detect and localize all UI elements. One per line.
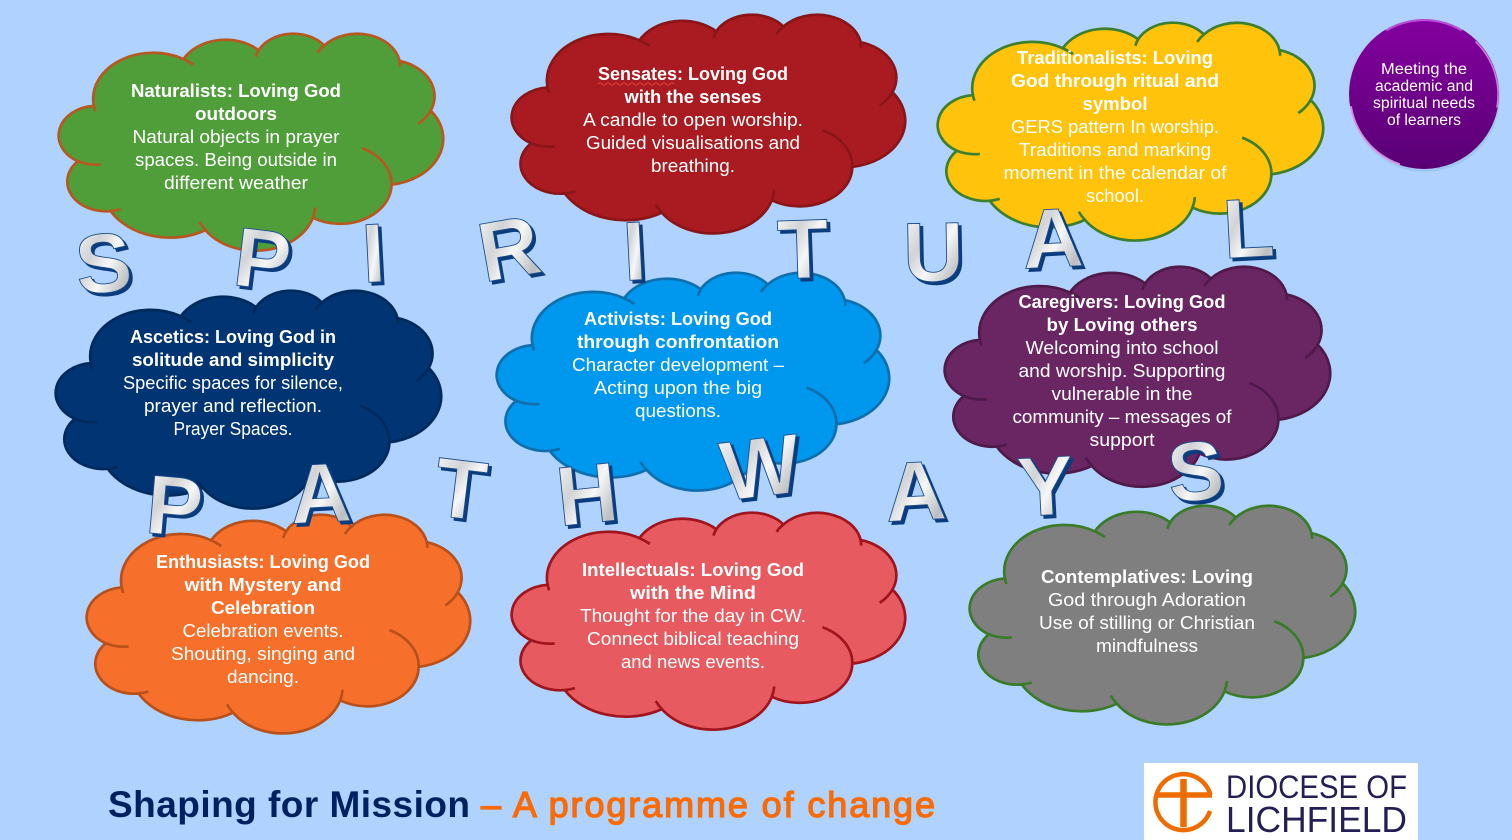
panel: Naturalists cloud: [59, 34, 443, 251]
text: Intellectuals: [580, 559, 806, 672]
text: Enthusiasts: Celebration: [211, 597, 315, 618]
icon: cross in circle: [1155, 774, 1212, 830]
heading: SPIRITUAL letters: [71, 180, 1277, 312]
text: Ascetics: Prayer Spaces.: [174, 418, 292, 439]
text: Caregivers: and worship. Supporting: [1018, 360, 1226, 381]
text: Intellectuals: Connect biblical teaching: [587, 628, 799, 649]
text: Caregivers: Welcoming into school: [1026, 337, 1218, 358]
text: Intellectuals: with the Mind: [629, 582, 756, 603]
text: Traditionalists: [1004, 47, 1227, 206]
heading: SPIRITUAL letters: U: [902, 204, 965, 300]
text: Ascetics: solitude and simplicity: [132, 349, 335, 370]
heading: SPIRITUAL letters: S: [71, 214, 135, 312]
text: Contemplatives: mindfulness: [1096, 635, 1198, 656]
text: Traditionalists: school.: [1086, 185, 1144, 206]
heading: SPIRITUAL letters: I: [620, 203, 649, 299]
panel: Intellectuals cloud: [512, 513, 905, 730]
heading: SPIRITUAL letters: L: [1220, 180, 1277, 276]
panel: Contemplatives cloud: [970, 506, 1355, 724]
logo: Diocese of Lichfield: [1144, 763, 1418, 840]
text: Sensates: [583, 63, 803, 176]
text: Caregivers: by Loving others: [1046, 314, 1198, 335]
footer title: Shaping for Mission: [108, 784, 935, 825]
heading: SPIRITUAL letters: I: [359, 205, 388, 301]
text: Activists: Character development –: [572, 354, 785, 375]
text: Traditionalists: moment in the calendar of: [1004, 162, 1227, 183]
logo wordmark: [1226, 769, 1407, 840]
text: Naturalists: spaces. Being outside in: [135, 149, 337, 170]
heading: PATHWAYS letters: [143, 416, 1227, 555]
text: Traditionalists: Traditionalists: Loving: [1017, 47, 1213, 68]
logo wordmark: DIOCESE OF: [1226, 769, 1407, 805]
text: Sensates: with the senses: [624, 86, 762, 107]
cloud shape: yellow: [938, 23, 1323, 241]
heading: SPIRITUAL letters: A: [1020, 190, 1085, 287]
text: Caregivers: Caregivers: Loving God: [1018, 291, 1226, 312]
cloud shape: coral: [512, 513, 905, 730]
heading: SPIRITUAL letters: T: [776, 201, 830, 297]
text: Traditionalists: symbol: [1082, 93, 1148, 114]
heading: PATHWAYS letters: S: [1163, 422, 1227, 520]
badge: Meeting the academic and spiritual needs of learners: academic and: [1375, 78, 1473, 95]
panel: Traditionalists cloud: [938, 23, 1323, 241]
text: Naturalists: different weather: [164, 172, 308, 193]
text: Ascetics: prayer and reflection.: [144, 395, 322, 416]
heading: PATHWAYS letters: T: [429, 439, 492, 539]
text: Intellectuals: Thought for the day in CW.: [580, 605, 806, 626]
text: Contemplatives: Contemplatives: Loving: [1041, 566, 1253, 587]
panel: Enthusiasts cloud: [87, 515, 470, 733]
text: Naturalists: outdoors: [195, 103, 277, 124]
panel: Ascetics cloud: [56, 291, 441, 509]
heading: PATHWAYS letters: W: [715, 416, 806, 519]
text: Enthusiasts: with Mystery and: [183, 574, 342, 595]
text: Activists: questions.: [635, 400, 721, 421]
text: Activists: Acting upon the big: [594, 377, 762, 398]
text: Traditionalists: God through ritual and: [1011, 70, 1219, 91]
heading: SPIRITUAL letters: P: [229, 209, 296, 309]
text: Ascetics: [123, 326, 343, 439]
text: Naturalists: [131, 80, 341, 193]
badge: Meeting the academic and spiritual needs of learners: Meeting the: [1381, 61, 1467, 78]
heading: PATHWAYS letters: A: [288, 445, 353, 542]
text: Traditionalists: Traditions and marking: [1019, 139, 1211, 160]
text: Sensates: Sensates: Loving God: [598, 63, 788, 84]
text: Caregivers: [1012, 291, 1232, 450]
text: Sensates: Guided visualisations and: [586, 132, 800, 153]
text: Ascetics: Ascetics: Loving God in: [130, 326, 336, 347]
logo wordmark: LICHFIELD: [1226, 799, 1407, 840]
text: Intellectuals: Intellectuals: Loving God: [582, 559, 804, 580]
footer title: Shaping for Mission: – A programme of change: [481, 784, 935, 825]
text: Contemplatives: God through Adoration: [1048, 589, 1246, 610]
text: Enthusiasts: Celebration events.: [182, 620, 344, 641]
text: Enthusiasts: dancing.: [227, 666, 299, 687]
text: Ascetics: Specific spaces for silence,: [123, 372, 343, 393]
cloud shape: red: [512, 15, 905, 233]
badge: Meeting the academic and spiritual needs of learners: of learners: [1387, 112, 1461, 129]
text: Activists: Activists: Loving God: [584, 308, 772, 329]
text: Naturalists: Naturalists: Loving God: [131, 80, 341, 101]
text: Enthusiasts: Enthusiasts: Loving God: [156, 551, 370, 572]
text: Caregivers: support: [1090, 429, 1154, 450]
cloud shape: grey: [970, 506, 1355, 724]
text: Caregivers: community – messages of: [1012, 406, 1232, 427]
text: Intellectuals: and news events.: [621, 651, 765, 672]
cloud shape: bright blue: [497, 273, 889, 491]
text: Enthusiasts: Shouting, singing and: [171, 643, 355, 664]
text: Activists: [572, 308, 785, 421]
heading: PATHWAYS letters: Y: [1015, 438, 1076, 534]
panel: Activists cloud: [497, 273, 889, 491]
panel: Caregivers cloud: [945, 267, 1330, 487]
text: Traditionalists: GERS pattern In worship.: [1011, 116, 1219, 137]
heading: PATHWAYS letters: A: [883, 443, 948, 540]
text: Caregivers: vulnerable in the: [1052, 383, 1192, 404]
text: Enthusiasts: [156, 551, 370, 687]
text: Activists: through confrontation: [577, 331, 779, 352]
panel: Sensates cloud: [512, 15, 905, 233]
cloud shape: navy: [56, 291, 441, 509]
heading: SPIRITUAL letters: R: [471, 197, 547, 300]
badge: Meeting the academic and spiritual needs of learners: spiritual needs: [1373, 95, 1475, 112]
text: Sensates: breathing.: [651, 155, 735, 176]
cloud shape: purple: [945, 267, 1330, 487]
heading: PATHWAYS letters: H: [552, 444, 622, 544]
text: Contemplatives: Use of stilling or Christian: [1039, 612, 1255, 633]
cloud shape: orange: [87, 515, 470, 733]
cloud shape: green: [59, 34, 443, 251]
footer title: Shaping for Mission: Shaping for Mission: [108, 784, 470, 825]
text: Naturalists: Natural objects in prayer: [132, 126, 340, 147]
spell-check underline: [598, 83, 674, 85]
heading: PATHWAYS letters: P: [143, 457, 207, 555]
text: Contemplatives: [1039, 566, 1255, 656]
text: Sensates: A candle to open worship.: [583, 109, 803, 130]
badge: Meeting the academic and spiritual needs of learners: [1349, 19, 1500, 172]
